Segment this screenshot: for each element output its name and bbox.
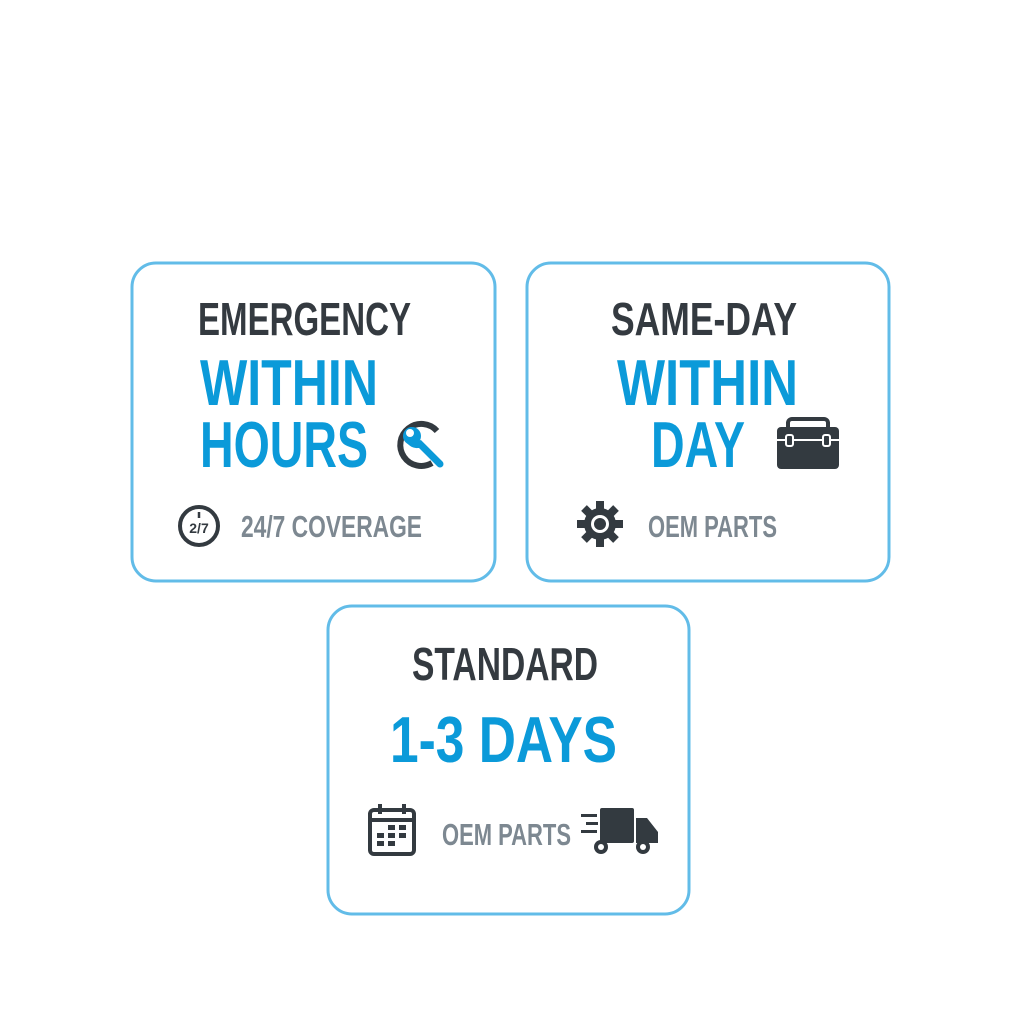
heading: same-day: SAME-DAY xyxy=(611,293,797,345)
icon: gear xyxy=(577,501,623,547)
icon: 24/7 clock: 2/7 xyxy=(189,520,209,536)
text: within day xyxy=(617,346,798,481)
panel: emergency xyxy=(132,263,495,581)
text: within hours: HOURS xyxy=(200,408,368,481)
text: within hours xyxy=(200,346,378,481)
icon: truck xyxy=(581,808,658,854)
text: within day: DAY xyxy=(651,408,745,481)
icon: calendar xyxy=(370,804,414,854)
icon: 24/7 clock xyxy=(180,507,218,545)
text: 24/7 coverage: 24/7 COVERAGE xyxy=(241,509,422,544)
text: within hours: WITHIN xyxy=(200,346,378,419)
heading: standard: STANDARD xyxy=(412,638,598,690)
panel: standard xyxy=(328,606,689,914)
icon: wrench in circle xyxy=(400,424,440,466)
text: within day: WITHIN xyxy=(617,346,798,419)
text: oem parts: OEM PARTS xyxy=(442,817,571,852)
panel: same-day xyxy=(527,263,889,581)
text: oem parts: OEM PARTS xyxy=(648,509,777,544)
text: 1-3 days: 1-3 DAYS xyxy=(390,703,617,776)
heading: emergency: EMERGENCY xyxy=(198,293,411,345)
icon: briefcase xyxy=(777,419,839,469)
